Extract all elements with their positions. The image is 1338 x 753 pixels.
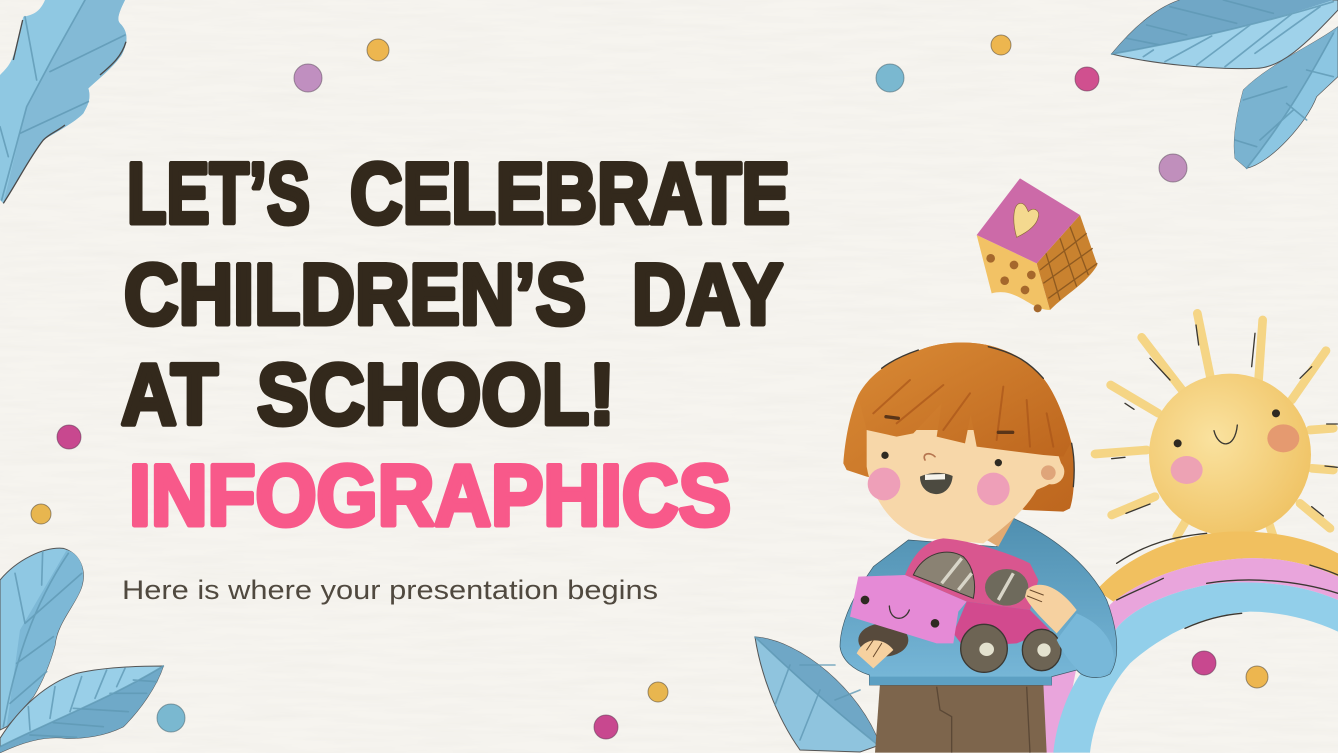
car face: [861, 596, 939, 628]
nose: [924, 454, 935, 460]
waistband: [869, 677, 1052, 685]
car roof and body: [905, 538, 1038, 610]
bead yellow: [367, 39, 389, 61]
title line 3: SCHOOL!: [257, 347, 615, 443]
rainbow: [1043, 531, 1338, 753]
bead blue: [876, 64, 904, 92]
title: [121, 146, 790, 544]
sun and rainbow illustration: [1043, 313, 1338, 753]
sun: [1095, 313, 1337, 537]
upper leaf: [1112, 0, 1338, 69]
right hand: [1025, 585, 1077, 633]
title line 1: LET’S: [127, 146, 310, 242]
bead yellow: [1246, 666, 1268, 688]
hair back: [843, 343, 1074, 512]
yellow band: [1097, 531, 1338, 602]
leaves: top left: [0, 0, 126, 203]
sun face: [1149, 374, 1311, 536]
upper leaf: [0, 548, 83, 730]
bead pink: [57, 425, 81, 449]
bead yellow: [648, 682, 668, 702]
title line 1: [127, 146, 790, 242]
bead pink: [1192, 651, 1216, 675]
bead pink: [1075, 67, 1099, 91]
toy block with heart: [977, 178, 1097, 312]
left hand: [857, 640, 893, 668]
face: [867, 430, 1063, 543]
rainbow pencil lines: [1117, 533, 1338, 628]
bead yellow: [991, 35, 1011, 55]
title line 2: DAY: [632, 247, 783, 343]
neck: [987, 513, 1017, 547]
scattered beads: right side: [876, 35, 1268, 688]
small leaf beside boy: [755, 637, 880, 752]
trousers: [875, 683, 1047, 753]
car windows: [913, 552, 975, 598]
eyebrows: [886, 417, 1013, 432]
leaves: top right: [1112, 0, 1338, 168]
title line 2: CHILDREN’S: [124, 247, 586, 343]
scattered beads: left side: [31, 39, 668, 739]
boy holding toy car: [840, 343, 1117, 753]
lower leaf: [1234, 27, 1338, 168]
fringe: [858, 343, 1071, 457]
car wheels: [961, 624, 1007, 672]
blue band: [1053, 582, 1338, 753]
leaves: bottom left: [0, 548, 163, 753]
bead purple: [294, 64, 322, 92]
hair pencil outline: [882, 347, 1074, 487]
bead purple: [1159, 154, 1187, 182]
title line 1: CELEBRATE: [350, 146, 790, 242]
right cuff: [1057, 613, 1114, 677]
eyes: [881, 452, 1002, 466]
bead yellow: [31, 504, 51, 524]
mouth: [920, 473, 953, 494]
bead blue: [157, 704, 185, 732]
title line 4: infographics: INFOGRAPHICS: [129, 448, 731, 544]
sun ray pencil marks: [1112, 325, 1337, 516]
bead pink: [594, 715, 618, 739]
lower leaf: [0, 666, 163, 753]
cheeks: [868, 468, 1010, 505]
sun rays: [1095, 313, 1333, 537]
title line 3: [121, 347, 615, 443]
sweater: [840, 518, 1117, 685]
far wheel: [858, 623, 908, 657]
subtitle: Here is where your presentation begins: [122, 575, 658, 605]
pink band: [1043, 558, 1338, 753]
title line 3: AT: [121, 347, 218, 443]
hair streaks: [873, 380, 1053, 447]
car: [850, 538, 1061, 672]
ear: [1039, 459, 1064, 484]
